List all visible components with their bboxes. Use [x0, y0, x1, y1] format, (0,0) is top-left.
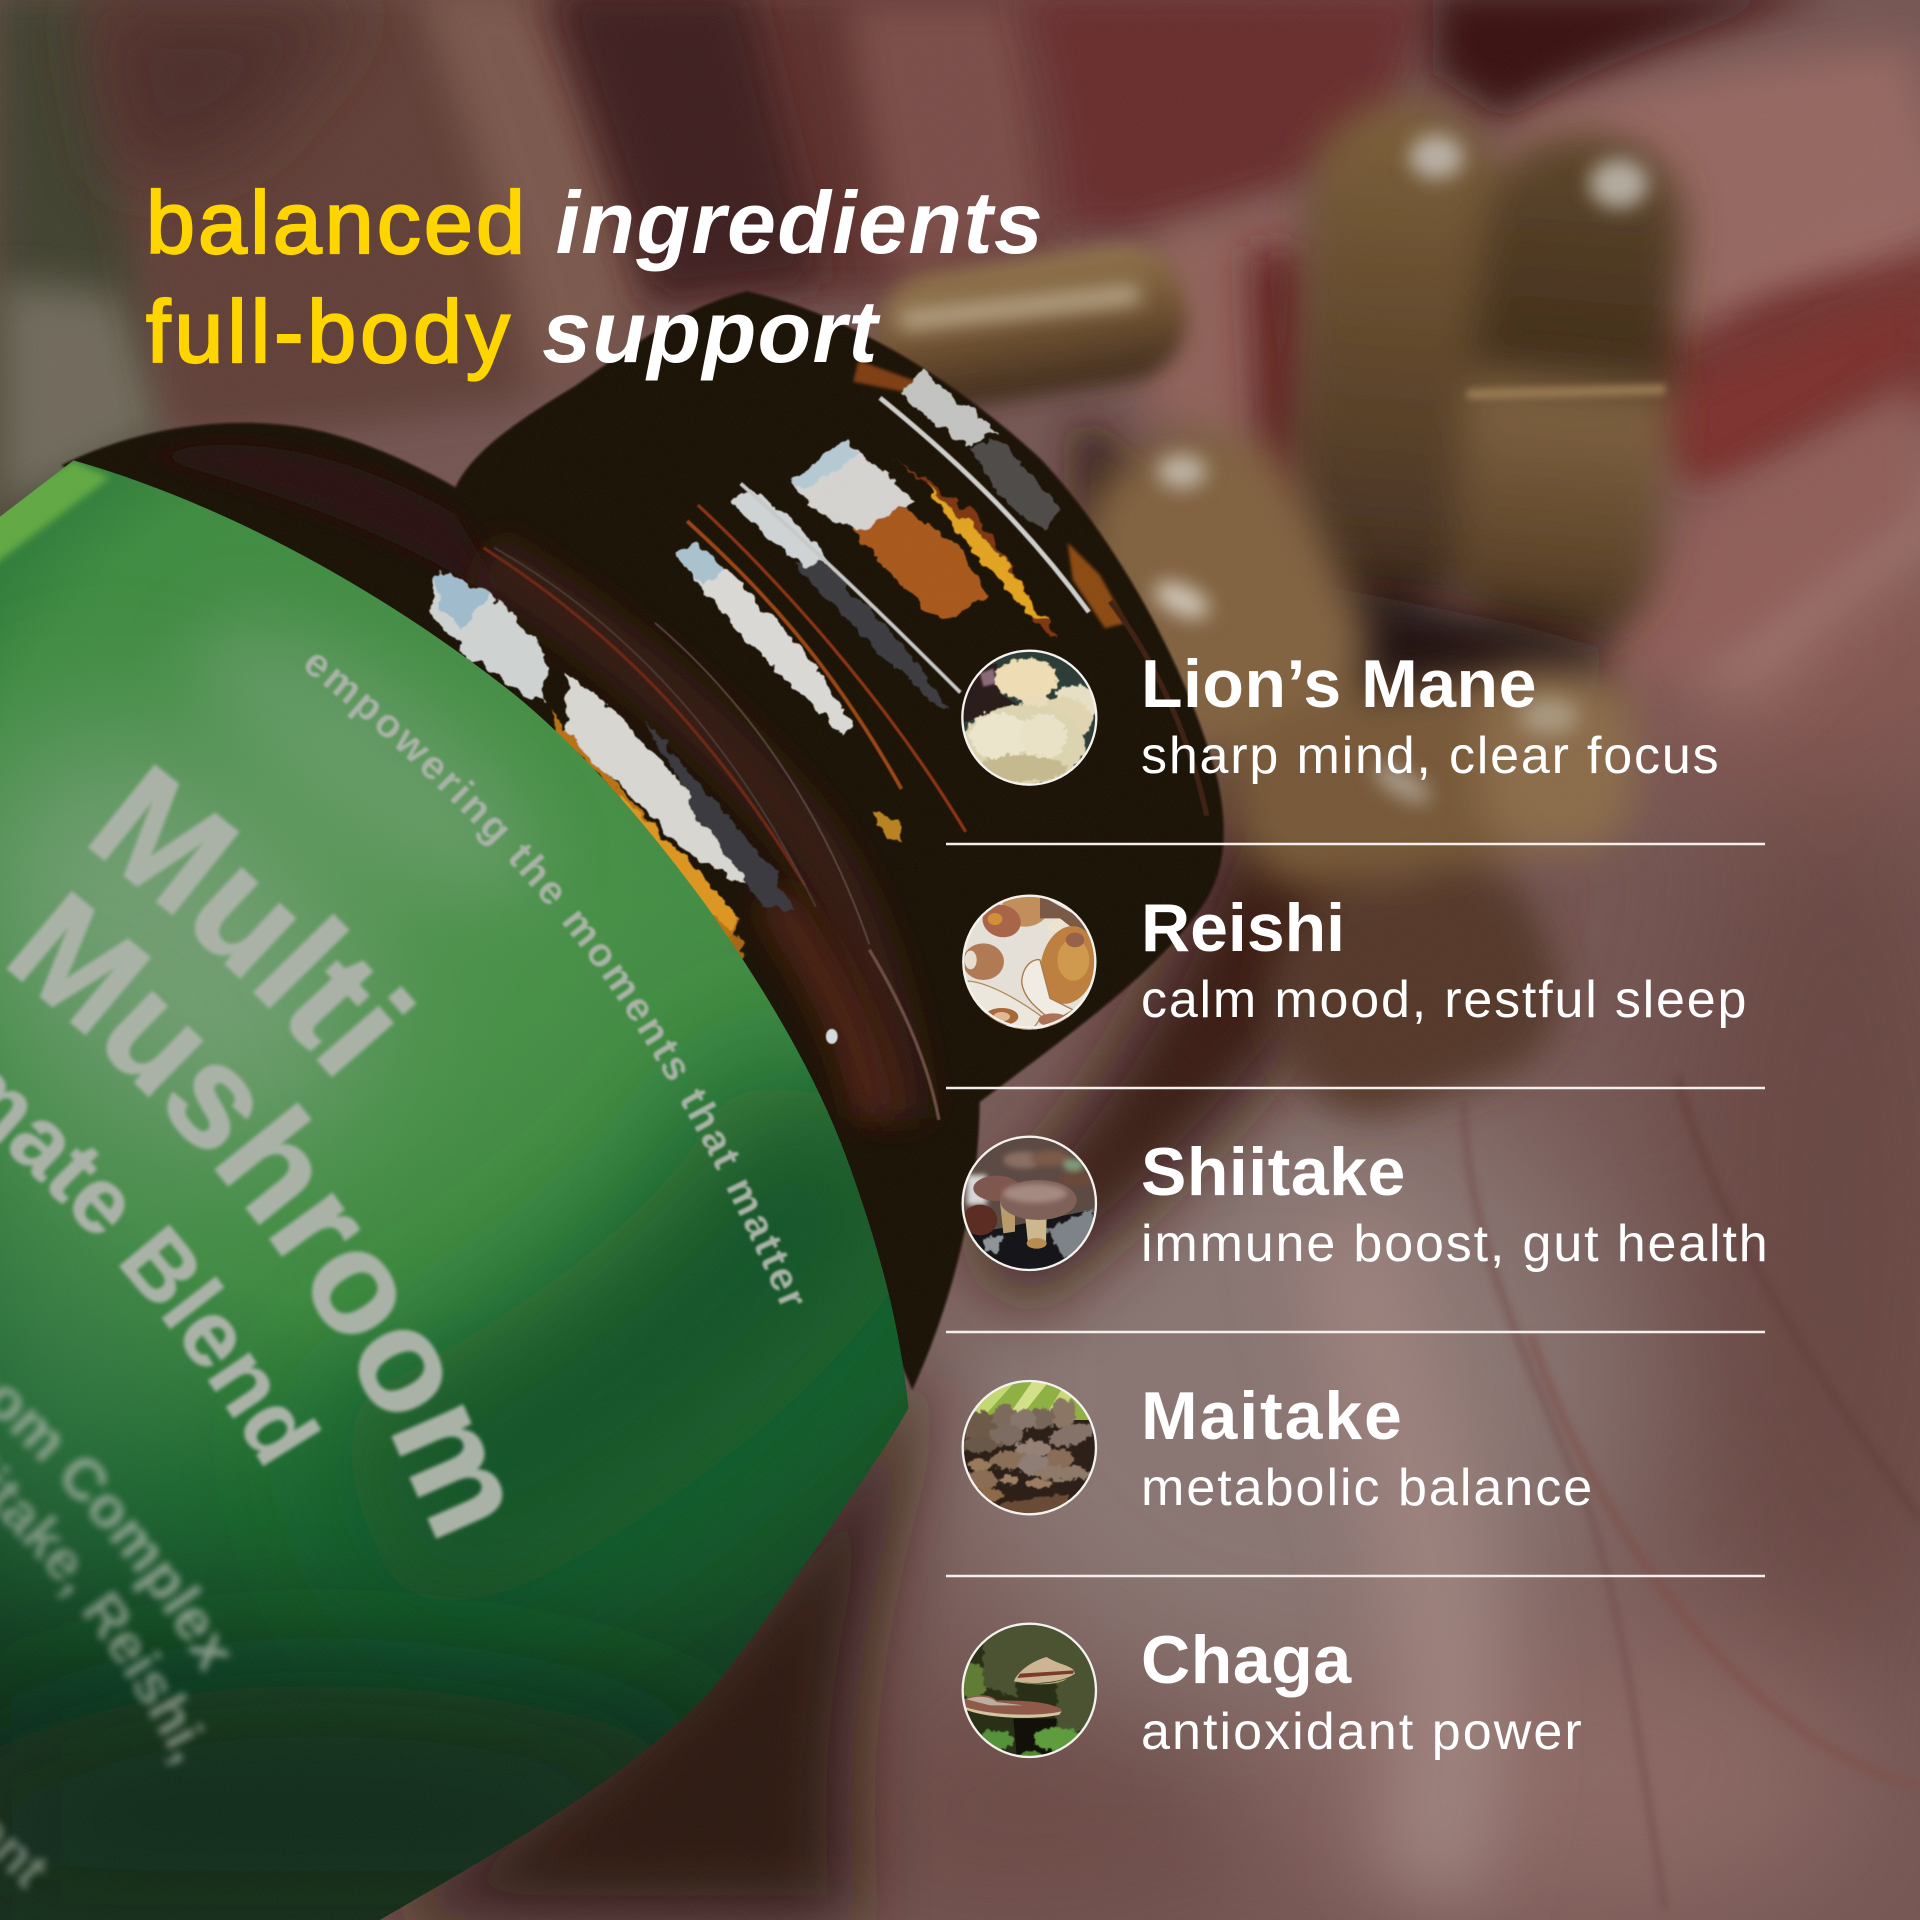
fingers top — [0, 0, 184, 563]
icon: lion's mane mushroom — [960, 650, 1100, 790]
heading — [146, 173, 1044, 381]
benefit: antioxidant power: antioxidant power — [1141, 1703, 1584, 1761]
icon: maitake mushroom — [960, 1380, 1100, 1520]
icon: shiitake mushroom — [960, 1135, 1100, 1275]
ingredient list — [946, 646, 1770, 1762]
benefit: sharp mind: sharp mind, clear focus — [1141, 727, 1720, 785]
capsules — [866, 98, 1692, 1141]
product name: Multi: Multi — [87, 763, 418, 1078]
label text — [0, 654, 804, 1892]
benefit: calm mood: calm mood, restful sleep — [1141, 971, 1748, 1029]
row: Chaga — [960, 1622, 1584, 1762]
amber tints — [484, 559, 901, 1120]
ring lines — [484, 398, 1207, 1120]
title: Maitake: Maitake — [1141, 1378, 1404, 1454]
green label — [0, 460, 908, 1920]
icon: reishi mushroom — [960, 890, 1103, 1035]
glass jar — [61, 291, 1224, 1390]
row: Maitake — [960, 1378, 1594, 1520]
icon: chaga mushroom — [960, 1622, 1100, 1762]
reflections — [430, 371, 1062, 958]
heading line 1: balanced ingredients — [146, 173, 1044, 272]
tagline on label: empowering the moments that matter — [304, 654, 804, 1306]
benefit: immune boost: immune boost, gut health — [1141, 1215, 1770, 1273]
bottle — [0, 290, 1225, 1920]
title: Shiitake: Shiitake — [1141, 1134, 1406, 1210]
heading line 2: full-body support — [146, 282, 881, 381]
row: Reishi — [960, 890, 1748, 1035]
dark shadow under bottle — [367, 1371, 931, 1920]
row: Shiitake — [960, 1134, 1770, 1275]
title: Lion's Mane: Lion’s Mane — [1141, 646, 1537, 722]
benefit: metabolic balance: metabolic balance — [1141, 1459, 1594, 1517]
row: Lion's Mane — [960, 646, 1720, 790]
title: Chaga: Chaga — [1141, 1622, 1352, 1698]
title: Reishi: Reishi — [1141, 890, 1345, 966]
